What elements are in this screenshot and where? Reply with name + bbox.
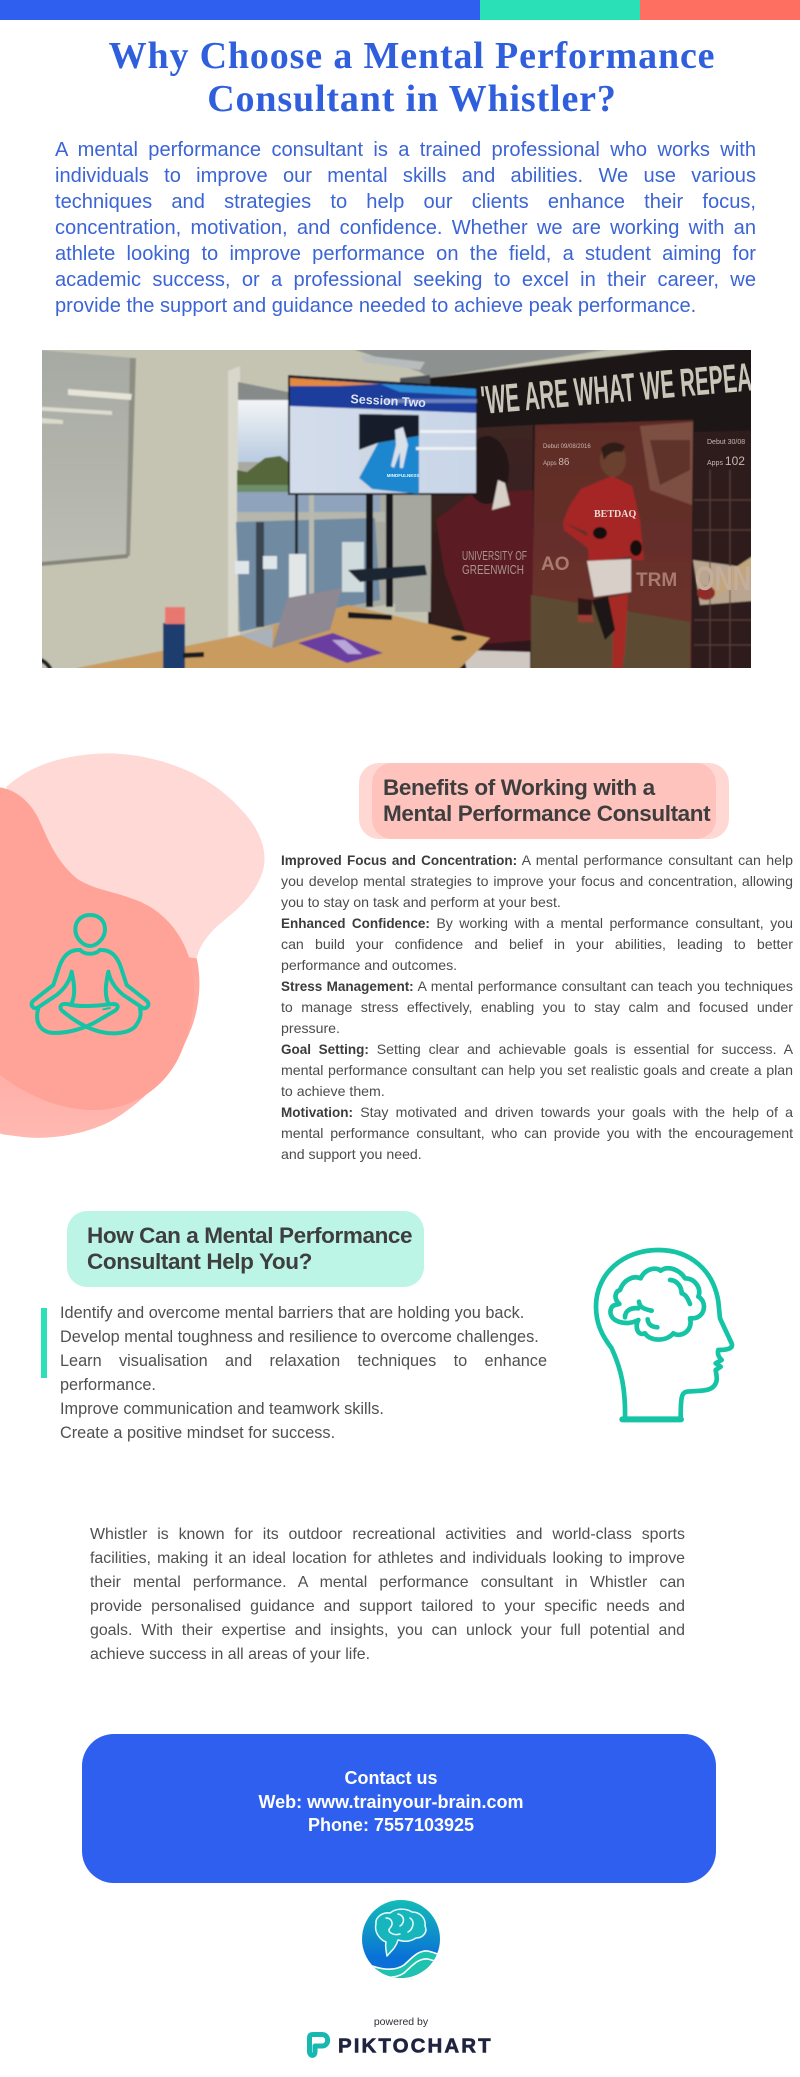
benefits text: Goal Setting: Setting clear and achievable goals is essential for success. A	[281, 1041, 793, 1057]
contact text: Phone: 7557103925	[308, 1815, 474, 1835]
benefits text	[281, 852, 793, 1162]
blobs	[0, 753, 264, 1138]
benefits text: Improved Focus and Concentration: A mental performance consultant can help	[281, 852, 793, 868]
intro paragraph: academic success, or a professional seeking to excel in their career, we	[55, 269, 756, 291]
intro paragraph: concentration, motivation, and confidence. Whether we are working with an	[55, 217, 756, 239]
piktochart logo: PIKTOCHART	[338, 2034, 493, 2058]
help list: Create a positive mindset for success.	[60, 1424, 335, 1442]
heading: benefits: Benefits of Working with a	[383, 775, 655, 800]
title	[109, 35, 715, 120]
whistler paragraph: goals. With their expertise and insights, you can unlock your full potential and	[90, 1622, 685, 1639]
benefits text: pressure.	[281, 1020, 340, 1036]
whistler paragraph: their mental performance. A mental performance consultant in Whistler can	[90, 1574, 685, 1591]
intro paragraph: A mental performance consultant is a trained professional who works with	[55, 139, 756, 161]
benefits text: performance and outcomes.	[281, 957, 457, 973]
heading: how can help: How Can a Mental Performance	[87, 1223, 412, 1248]
powered by: powered by	[374, 2016, 428, 2028]
photo: consulting room with screen and player banners: TRM	[636, 570, 677, 591]
photo: consulting room with screen and player banners: Session Two	[350, 392, 427, 410]
intro paragraph: provide the support and guidance needed to achieve peak performance.	[55, 295, 696, 317]
heading: benefits	[383, 775, 710, 826]
intro paragraph	[55, 139, 756, 317]
photo: consulting room with screen and player banners: Debut 09/08/2016	[543, 444, 591, 450]
heading pill: benefits	[359, 763, 729, 839]
photo: consulting room with screen and player banners: ONN	[695, 560, 751, 598]
heading: how can help: Consultant Help You?	[87, 1249, 312, 1274]
help list: Identify and overcome mental barriers that are holding you back.	[60, 1304, 524, 1322]
help list: Learn visualisation and relaxation techniques to enhance	[60, 1352, 547, 1370]
heading pill: how can help	[67, 1211, 424, 1287]
icon: brain logo	[362, 1900, 440, 1978]
benefits text: you to stay on task and perform at your best.	[281, 894, 561, 910]
benefits text: to achieve them.	[281, 1083, 385, 1099]
whistler paragraph: facilities, making it an ideal location for athletes and individuals looking to improve	[90, 1550, 685, 1567]
icon: head with brain	[594, 1248, 734, 1422]
photo: consulting room with screen and player banners: Apps 86	[543, 457, 570, 468]
photo: consulting room with screen and player banners	[42, 350, 751, 668]
photo: consulting room with screen and player banners: GREENWICH	[462, 562, 524, 577]
benefits text: mental performance consultant can help you set realistic goals and create a plan	[281, 1062, 793, 1078]
photo: consulting room with screen and player banners: UNIVERSITY OF	[462, 548, 527, 563]
photo: consulting room with screen and player banners: AO	[541, 554, 570, 575]
title: Why Choose a Mental Performance	[109, 35, 715, 77]
accent bar	[41, 1308, 47, 1378]
contact text: Web: www.trainyour-brain.com	[258, 1792, 524, 1812]
heading: how can help	[87, 1223, 412, 1274]
icon: meditating figure	[30, 913, 150, 1036]
top colour bar	[0, 0, 800, 20]
benefits text: Motivation: Stay motivated and driven towards your goals with the help of a	[281, 1104, 793, 1120]
contact text: Contact us	[344, 1768, 438, 1788]
benefits text: and support you need.	[281, 1146, 422, 1162]
title: Consultant in Whistler?	[207, 78, 617, 120]
help list: Improve communication and teamwork skills.	[60, 1400, 384, 1418]
contact text	[258, 1768, 524, 1835]
benefits text: Stress Management: A mental performance consultant can teach you techniques	[281, 978, 793, 994]
benefits text: mental performance consultant, who can provide you with the encouragement	[281, 1125, 793, 1141]
help list: performance.	[60, 1376, 156, 1394]
photo: consulting room with screen and player banners: BETDAQ	[594, 509, 636, 520]
whistler paragraph: Whistler is known for its outdoor recreational activities and world-class sports	[90, 1526, 685, 1543]
help list: Develop mental toughness and resilience to overcome challenges.	[60, 1328, 539, 1346]
intro paragraph: techniques and strategies to help our clients enhance their focus,	[55, 191, 756, 213]
contact panel	[82, 1734, 716, 1883]
whistler paragraph: provide personalised guidance and support tailored to your specific needs and	[90, 1598, 685, 1615]
benefits text: can build your confidence and belief in your abilities, leading to better	[281, 936, 793, 952]
whistler paragraph	[90, 1526, 685, 1663]
photo: consulting room with screen and player banners: MINDFULNESS	[387, 473, 419, 478]
whistler paragraph: achieve success in all areas of your life.	[90, 1646, 370, 1663]
benefits text: you develop mental strategies to improve your focus and concentration, allowing	[281, 873, 793, 889]
heading: benefits: Mental Performance Consultant	[383, 801, 710, 826]
benefits text: Enhanced Confidence: By working with a mental performance consultant, you	[281, 915, 793, 931]
intro paragraph: individuals to improve our mental skills and abilities. We use various	[55, 165, 756, 187]
benefits text: to manage stress effectively, enabling you to stay calm and focused under	[281, 999, 793, 1015]
help list	[60, 1304, 547, 1442]
photo: consulting room with screen and player banners: Debut 30/08	[707, 439, 745, 446]
intro paragraph: athlete looking to improve performance on the field, a student aiming for	[55, 243, 756, 265]
photo: consulting room with screen and player banners: Apps 102	[707, 454, 745, 468]
